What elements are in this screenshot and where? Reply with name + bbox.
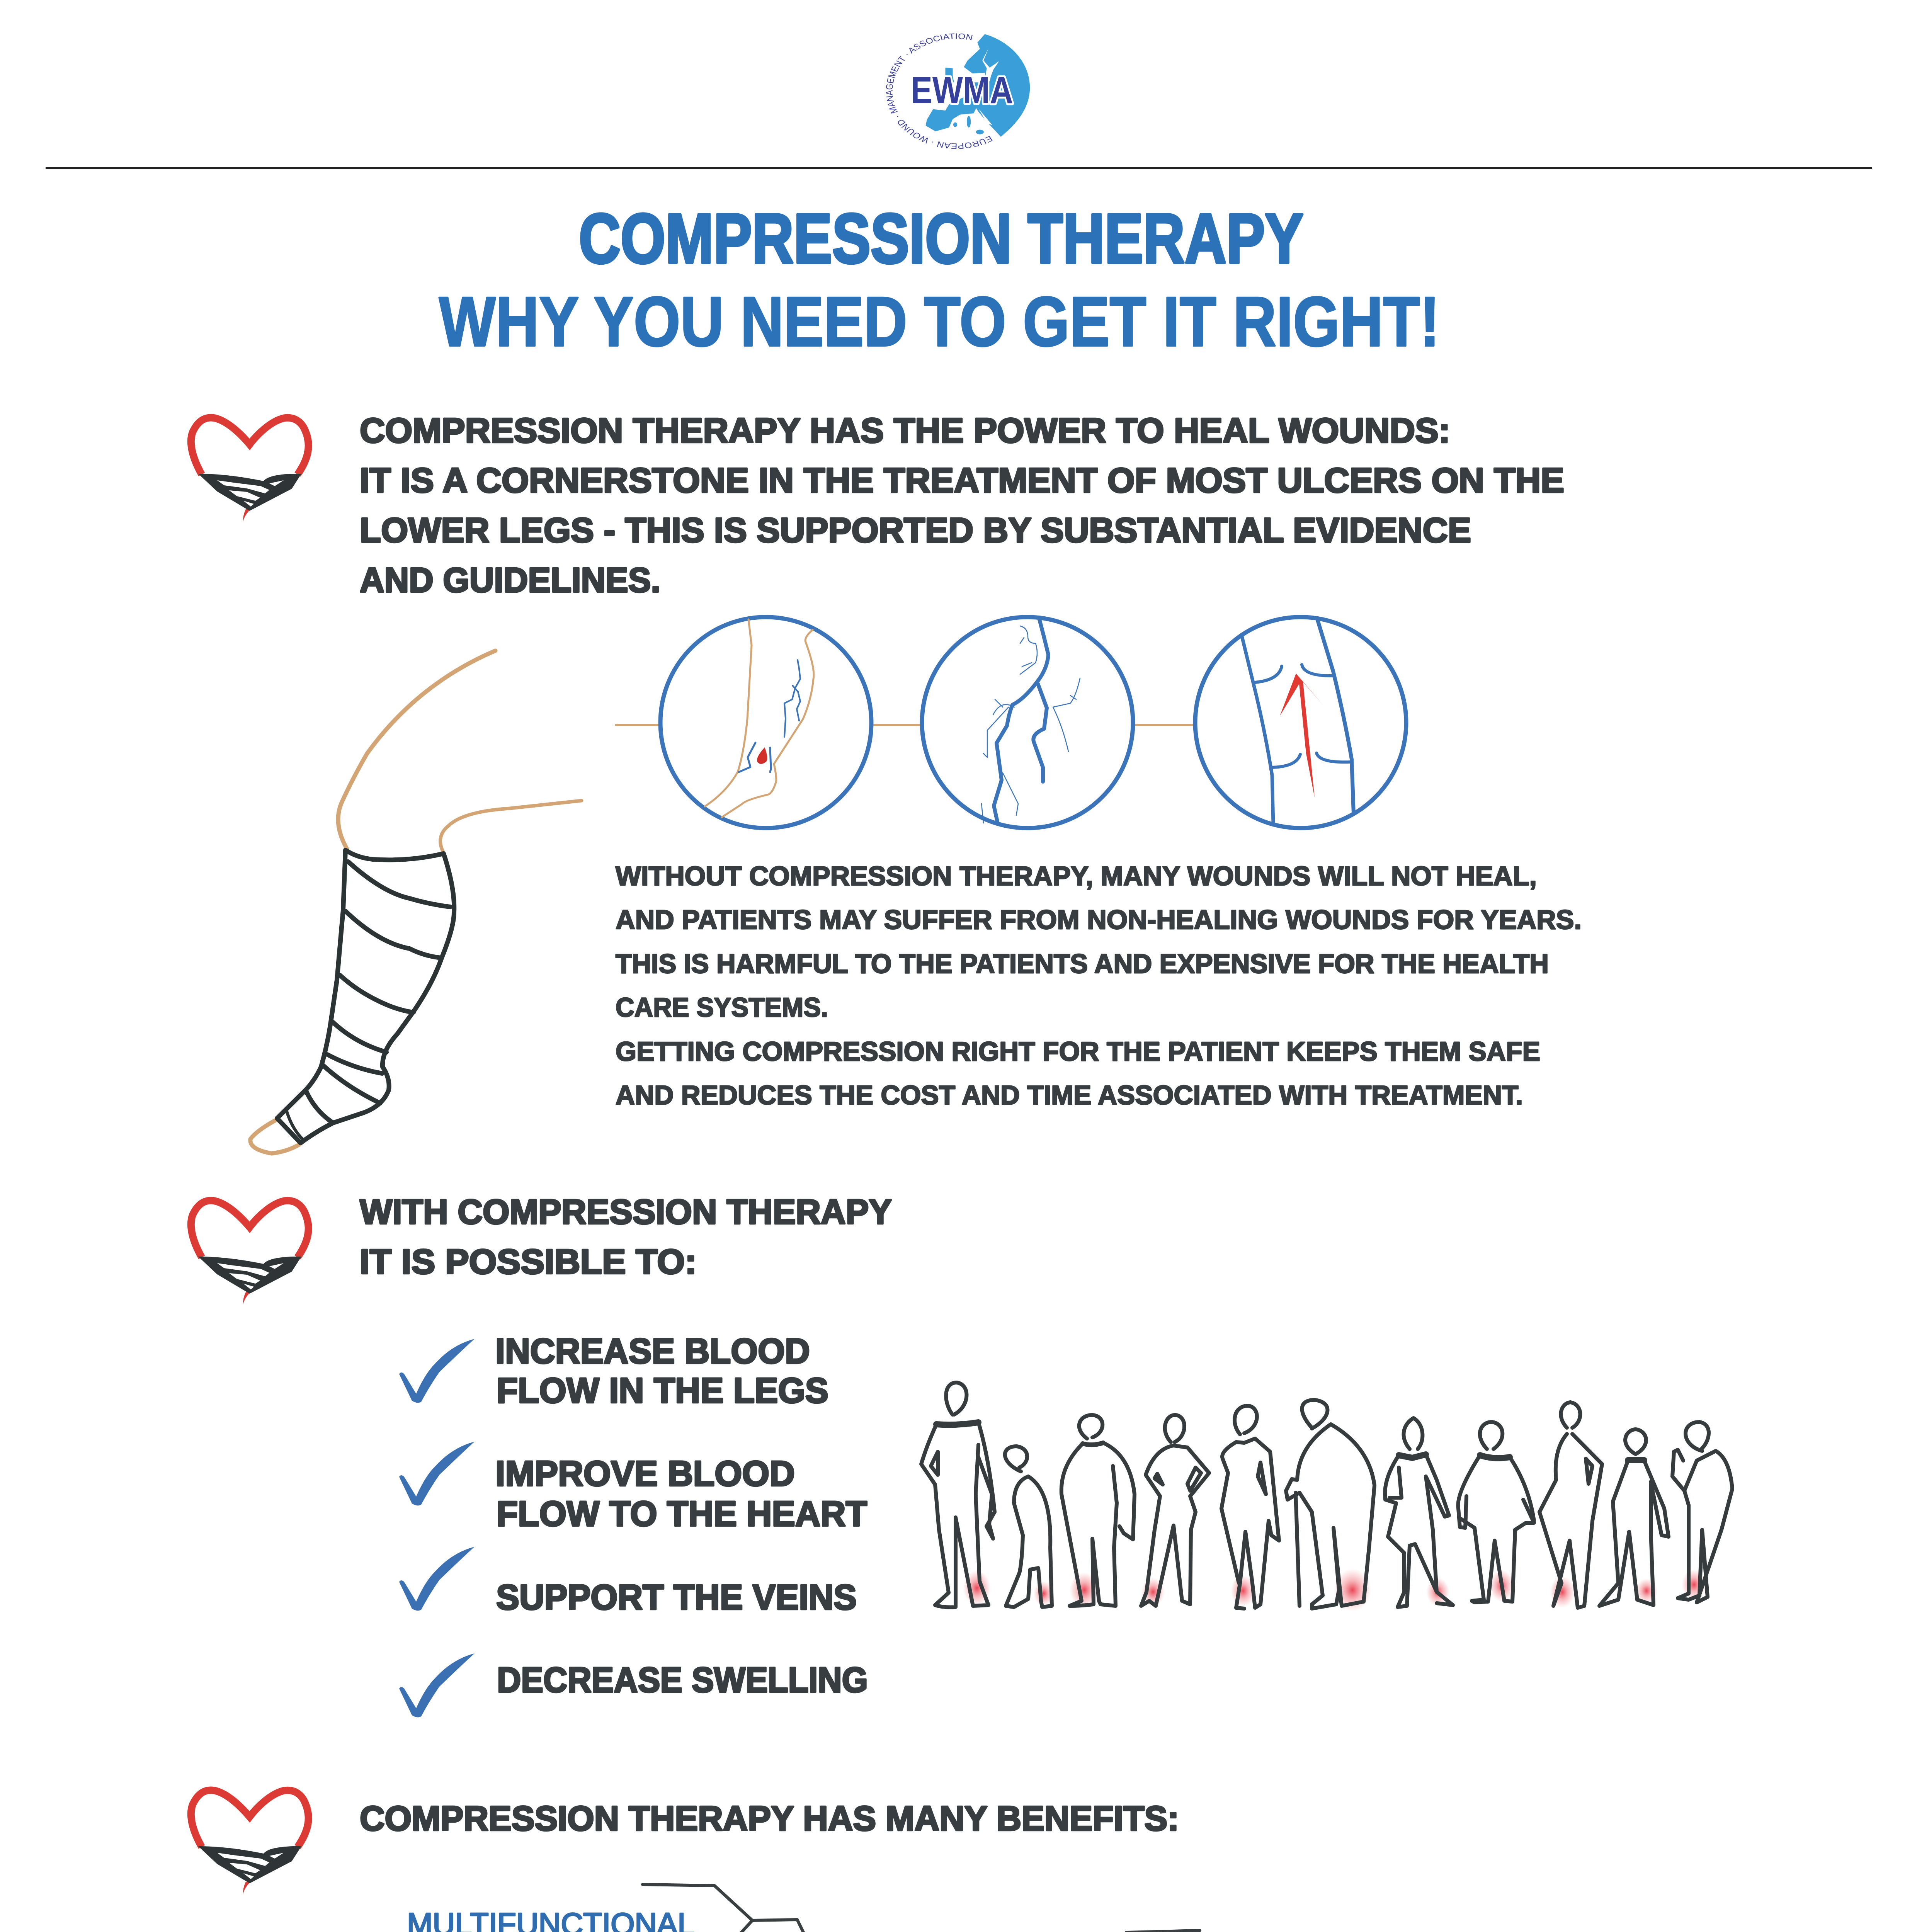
illustration: group of people [921, 1383, 1732, 1611]
text: section two heading: IT IS POSSIBLE TO: [360, 1243, 697, 1281]
text: section three heading: COMPRESSION THERAPY HAS MANY BENEFITS: [360, 1799, 1179, 1838]
panel: vein valves circle [1195, 617, 1406, 828]
check item: decrease swelling: DECREASE SWELLING [497, 1660, 868, 1700]
connector line [615, 724, 1195, 726]
text: section one heading [360, 412, 1564, 600]
text: section one body: CARE SYSTEMS. [616, 992, 828, 1022]
panel: veins circle [922, 617, 1133, 828]
text: section two heading: WITH COMPRESSION THERAPY [360, 1193, 892, 1231]
text: section one heading: LOWER LEGS - THIS IS SUPPORTED BY SUBSTANTIAL EVIDENCE [360, 511, 1471, 550]
icon: bandaged heart 3 [191, 1790, 308, 1894]
check item: support veins: SUPPORT THE VEINS [496, 1578, 857, 1617]
icon: bandaged heart [191, 418, 308, 522]
check item: increase blood flow: FLOW IN THE LEGS [497, 1371, 828, 1410]
icon: check mark 4 [399, 1653, 475, 1717]
title: COMPRESSION THERAPY [579, 199, 1303, 278]
checklist [399, 1332, 868, 1717]
panel: skin ulcer circle [660, 617, 871, 828]
check item: improve blood flow: IMPROVE BLOOD [495, 1454, 795, 1493]
icon: check mark [399, 1339, 475, 1403]
title [439, 199, 1440, 361]
icon: check mark 3 [399, 1547, 475, 1611]
check item: improve blood flow: FLOW TO THE HEART [497, 1494, 867, 1534]
text: section one heading: COMPRESSION THERAPY HAS THE POWER TO HEAL WOUNDS: [360, 412, 1450, 450]
text: section one heading: IT IS A CORNERSTONE IN THE TREATMENT OF MOST ULCERS ON THE [360, 461, 1564, 500]
logo: EWMA: EWMA [911, 69, 1013, 111]
text: section one heading: AND GUIDELINES. [360, 561, 660, 600]
text: section one body: AND PATIENTS MAY SUFFER FROM NON-HEALING WOUNDS FOR YEARS. [616, 905, 1582, 935]
mind map connectors [418, 1884, 1372, 1932]
text: section one body: GETTING COMPRESSION RIGHT FOR THE PATIENT KEEPS THEM SAFE [616, 1036, 1540, 1066]
check item: increase blood flow: INCREASE BLOOD [495, 1332, 810, 1371]
logo: EWMA: EUROPEAN · WOUND · MANAGEMENT · ASSOCIATION [884, 32, 994, 151]
illustration: bandaged leg [250, 651, 582, 1153]
check item: increase blood flow [495, 1332, 828, 1410]
icon: check mark 2 [399, 1442, 475, 1505]
text: section one body: AND REDUCES THE COST AND TIME ASSOCIATED WITH TREATMENT. [616, 1080, 1523, 1110]
title: WHY YOU NEED TO GET IT RIGHT! [439, 282, 1440, 361]
text: section one body [616, 861, 1582, 1110]
text: section one body: THIS IS HARMFUL TO THE PATIENTS AND EXPENSIVE FOR THE HEALTH [616, 949, 1549, 979]
check item: improve blood flow [495, 1454, 867, 1534]
text: section two heading [360, 1193, 892, 1281]
icon: bandaged heart 2 [191, 1201, 308, 1304]
text: section one body: WITHOUT COMPRESSION THERAPY, MANY WOUNDS WILL NOT HEAL, [616, 861, 1537, 891]
